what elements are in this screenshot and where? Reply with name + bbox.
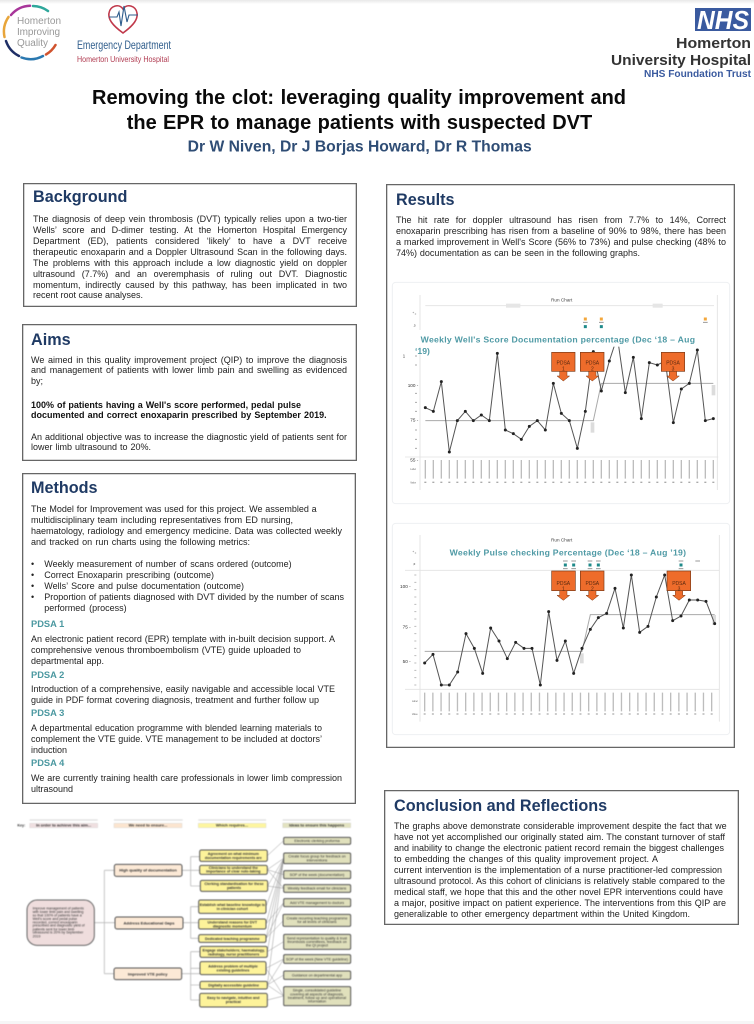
secondary drivers: Address problem of multiple — [208, 964, 258, 968]
chart: weekly Well's score run chart: ⌕ — [413, 323, 416, 328]
secondary drivers: in clinician cohort — [217, 907, 249, 911]
aim box: ultrasound is 20% by September — [33, 931, 84, 935]
aim box: 2019 — [33, 934, 41, 938]
secondary drivers: documentation requirements are — [205, 856, 262, 860]
list: metrics: • — [31, 559, 34, 569]
panel: methods — [22, 473, 356, 804]
aim box: patients sent for lower limb — [33, 927, 74, 931]
panel: results — [386, 184, 735, 748]
secondary drivers — [199, 850, 268, 1007]
text: additional objective: lower limb ultrasound to 20%. — [31, 442, 151, 452]
primary drivers: Address Educational Gaps — [124, 920, 175, 925]
change ideas: Add VTE management to doctors — [290, 901, 344, 905]
secondary drivers: Clerking standardisation for these — [204, 882, 264, 886]
aim box: Improve management of patients — [33, 907, 84, 911]
secondary drivers: Understand reasons for DVT — [208, 920, 258, 924]
text: results body: 74%) documentation as can be seen in the following graphs. — [396, 248, 640, 258]
change ideas: interventions — [307, 858, 328, 862]
aim box: so that 100% of patients have a — [33, 913, 82, 917]
chart: weekly Well's score run chart: Label — [410, 469, 416, 471]
text: PDSA 3: induction — [31, 745, 67, 755]
text: conclusion body: a major, positive impact on patient experience. The interventions from this QIP are — [394, 898, 726, 908]
text: conclusion body: generalizable to other emergency department within the United Kingdom. — [394, 909, 690, 919]
text: conclusion body: current intervention is the implementation of a nurse practitioner-led compression — [394, 865, 722, 875]
chart: weekly pulse checking run chart: Run Chart — [551, 538, 573, 543]
secondary drivers: practical — [226, 1000, 241, 1004]
callout: PDSA 1 marker: 1 — [562, 586, 565, 592]
text: aims target: 100% of patients having a Well's score performed, pedal pulse — [31, 400, 301, 410]
text: results body — [396, 215, 726, 258]
secondary drivers: Agreement on what minimum — [208, 852, 260, 856]
text: conclusion body: ultrasound protocol. As this cohort of clinicians is relatively stable compared to the — [394, 876, 725, 886]
key row: Key: — [17, 824, 25, 828]
aim box: with lower limb pain and swelling — [33, 910, 83, 914]
list: metrics: Weekly measurement of number of scans ordered (outcome) — [44, 559, 292, 569]
text: PDSA 2: Introduction of a comprehensive, easily navigable and accessible local VTE — [31, 684, 335, 694]
text: conclusion body: have not yet accomplished our originally stated aim. The constant turnover of staff — [394, 832, 725, 842]
chart: weekly Well's score run chart — [392, 282, 730, 504]
chart: weekly Well's score run chart: ⁺₊ — [412, 310, 416, 315]
change ideas: thrombosis committees, feedback on — [287, 940, 347, 944]
text: aims target — [31, 400, 327, 420]
change ideas: Weekly feedback email for clinicians — [288, 887, 346, 891]
text: Homerton University Hospital: Homerton University Hospital — [77, 55, 169, 64]
text: PDSA 2 — [31, 684, 335, 705]
aim box: recorded, correct enoxaparin — [33, 920, 77, 924]
panel: background — [23, 183, 357, 307]
list: metrics: • — [31, 581, 34, 591]
chart: weekly Well's score run chart: 55 - — [410, 457, 419, 462]
text: methods intro: haematology, radiology and emergency medicine. Data was collected weekly — [31, 526, 342, 536]
change ideas: covering all aspects of diagnosis, — [290, 992, 344, 996]
secondary drivers: Easy to navigate, intuitive and — [207, 996, 260, 1000]
text: PDSA 3 — [31, 723, 322, 755]
secondary drivers: Dedicated teaching programme — [205, 937, 260, 941]
secondary drivers: patients — [227, 886, 241, 890]
chart: weekly Well's score run chart: 100 - — [408, 383, 419, 388]
list: metrics: Wells’ Score and pulse documentation (outcome) — [44, 581, 244, 591]
text: PDSA 2: guide in PDF format covering diagnosis, treatment and further follow up — [31, 695, 319, 705]
icon: Homerton Improving Quality ring: Quality — [17, 38, 48, 49]
chart: weekly pulse checking run chart — [392, 523, 730, 735]
icon: NHS lozenge: NHS — [697, 5, 750, 35]
key row: We need to ensure... — [129, 823, 167, 828]
list: metrics — [31, 559, 344, 613]
change ideas: Electronic clerking proforma — [294, 839, 341, 843]
text: conclusion body — [394, 821, 727, 919]
connectors: primary drivers — [94, 857, 200, 1000]
list: metrics: • — [31, 592, 34, 602]
text: Emergency Department: Emergency Department — [77, 40, 172, 52]
change ideas: Send representation to quality & trust — [287, 936, 347, 940]
heading: PDSA 3: PDSA 3 — [31, 708, 64, 718]
key row — [17, 820, 351, 828]
chart: weekly pulse checking run chart: 75 - — [403, 624, 411, 629]
change ideas: SOP of the week (documentation) — [290, 873, 344, 877]
callout: PDSA 3 marker: 3 — [678, 586, 681, 592]
text: PDSA 1: departmental app. — [31, 656, 104, 666]
text: background body: Department (ED), patients considered ‘likely’ to have a DVT receive — [33, 236, 347, 246]
chart: weekly Well's score run chart: 75 - — [410, 418, 419, 423]
chart: weekly pulse checking run chart: Label — [412, 701, 418, 703]
change ideas: Guidance on departmental app — [292, 973, 342, 977]
text: PDSA 1: An electronic patient record (EPR) template with in-built decision support. A — [31, 634, 335, 644]
list: metrics: Proportion of patients diagnosed with DVT divided by the number of scans — [44, 592, 344, 602]
text: background body: Wells’ score and D-dimer testing. At the Homerton Hospital Emergency — [33, 225, 347, 235]
text: aims intro — [31, 355, 347, 386]
callout: PDSA 3 marker: PDSA — [666, 361, 680, 367]
title: the EPR to manage patients with suspected DVT — [127, 112, 592, 134]
change ideas: Single, consolidated guideline — [293, 989, 341, 993]
text: PDSA 4: ultrasound — [31, 784, 73, 794]
icon: heart with ECG trace — [109, 6, 138, 33]
text: aims intro: by; — [31, 376, 43, 386]
change ideas — [283, 837, 351, 1006]
list: metrics: Correct Enoxaparin prescribing (outcome) — [44, 570, 214, 580]
logo: NHS Homerton University Hospital — [611, 5, 752, 80]
text: PDSA 1 — [31, 634, 335, 666]
text: results body: a marked improvement in Well's Score (56% to 73%) and pulse checking (48% to — [396, 237, 726, 247]
text: NHS Foundation Trust: NHS Foundation Trust — [644, 69, 752, 80]
text: Homerton: Homerton — [676, 35, 751, 52]
chart: weekly pulse checking run chart: 50 - — [403, 659, 411, 664]
callout: PDSA 3 marker: PDSA — [672, 581, 686, 587]
text: background body: ultrasound (7.7%) and an overemphasis of ruling out DVT. Diagnostic — [33, 269, 347, 279]
text: background body: recent root cause analyses. — [33, 290, 143, 300]
chart: weekly pulse checking run chart: ⁺₊ — [412, 549, 416, 554]
heading: background: Background — [33, 188, 127, 206]
aim box: Well's score and pedal pulse — [33, 917, 77, 921]
text: conclusion body: medical staff, we hope that this and the other novel EPR interventions could have — [394, 887, 723, 897]
text: conclusion body: The graphs above demonstrate considerable improvement despite the fact that we — [394, 821, 727, 831]
panel: conclusion and reflections — [384, 790, 739, 925]
text: methods intro: The Model for Improvement was used for this project. We assembled a — [31, 504, 317, 514]
logo: Homerton Improving Quality and Emergency Department — [2, 4, 172, 64]
text: background body: The problems with this approach include a low diagnostic yield on doppler — [33, 258, 347, 268]
secondary drivers: importance of clear note-taking — [206, 870, 261, 874]
chart: weekly pulse checking run chart: Weekly Pulse checking Percentage (Dec ‘18 – Aug ’19) — [450, 547, 686, 557]
callout: PDSA 2 marker: 2 — [591, 586, 594, 592]
key row: Ideas to ensure this happens — [289, 823, 345, 828]
chart: weekly Well's score run chart: Value — [410, 482, 417, 484]
change ideas: Create focus group for feedback on — [288, 855, 346, 859]
heading: methods: Methods — [31, 479, 98, 497]
text: results body: enoxaparin prescribing has risen from a baseline of 90% to 98%, there has been — [396, 226, 726, 236]
heading: results: Results — [396, 191, 454, 209]
text: background body — [33, 214, 347, 300]
driver diagram — [16, 819, 352, 1008]
callout: PDSA 1 marker: PDSA — [557, 581, 571, 587]
heading: PDSA 1: PDSA 1 — [31, 619, 64, 629]
change ideas: information — [308, 1000, 326, 1004]
primary drivers — [114, 864, 183, 980]
icon: Homerton Improving Quality ring: Improving — [17, 27, 60, 38]
callout: PDSA 2 marker — [580, 571, 604, 600]
aim box — [27, 900, 94, 945]
callout: PDSA 2 marker: PDSA — [586, 581, 600, 587]
secondary drivers: Digitally accessible guideline — [208, 984, 259, 988]
list: metrics: • — [31, 570, 34, 580]
text: PDSA 4: We are currently training health care professionals in lower limb compression — [31, 773, 342, 783]
text: background body: The diagnosis of deep vein thrombosis (DVT) typically relies upon a two-tier — [33, 214, 347, 224]
text: methods intro: and tracked on run charts using the following metrics: — [31, 537, 250, 547]
chart: weekly pulse checking run chart: ⌕ — [413, 561, 416, 566]
text: methods intro — [31, 504, 342, 547]
heading: conclusion: Conclusion and Reflections — [394, 797, 607, 815]
primary drivers: Improved VTE policy — [128, 971, 168, 976]
change ideas: Create recurring teaching programme — [287, 916, 347, 920]
secondary drivers: Clinicians to understand the — [209, 866, 258, 870]
text: University Hospital: University Hospital — [611, 52, 751, 69]
text: background body: therapeutic enoxaparin and a Doppler Ultrasound Scan in the following days. — [33, 247, 347, 257]
authors: Dr W Niven, Dr J Borjas Howard, Dr R Thomas — [188, 138, 532, 156]
chart: weekly Well's score run chart: Weekly Well's Score Documentation percentage (Dec ‘18 – Aug — [421, 334, 695, 344]
title — [92, 87, 626, 134]
text: methods intro: multidisciplinary team including representatives from ED nursing, — [31, 515, 293, 525]
chart: weekly pulse checking run chart: 100 - — [400, 584, 411, 589]
key row: In order to achieve this aim... — [36, 823, 91, 828]
connectors: drivers to ideas — [266, 841, 284, 1000]
text: results body: The hit rate for doppler ultrasound has risen from 7.7% to 14%, Correct — [396, 215, 726, 225]
heading: PDSA 2: PDSA 2 — [31, 670, 64, 680]
title: Removing the clot: leveraging quality improvement and — [92, 87, 626, 109]
callout: PDSA 1 marker: PDSA — [557, 361, 571, 367]
text: PDSA 3: A departmental education programme with blended learning materials to — [31, 723, 322, 733]
callout: PDSA 2 marker: 2 — [591, 367, 594, 373]
text: background body: momentum, indirectly caused by this pathway, has been implicated in two — [33, 280, 347, 290]
change ideas: the QI project — [306, 944, 328, 948]
secondary drivers: Engage stakeholders; haematology, — [203, 948, 265, 952]
text: additional objective — [31, 432, 347, 452]
heading: aims: Aims — [31, 331, 71, 349]
heading: PDSA 4: PDSA 4 — [31, 758, 64, 768]
change ideas: SOP of the week (New VTE guideline) — [286, 957, 348, 961]
list: metrics: performed (process) — [44, 603, 127, 613]
secondary drivers: diagnostic momentum — [213, 924, 253, 928]
callout: PDSA 3 marker: 3 — [672, 367, 675, 373]
icon: Homerton Improving Quality ring: Homerton — [17, 16, 61, 27]
text: PDSA 1: comprehensive venous thromboembolism (VTE) guide uploaded to — [31, 645, 301, 655]
callout: PDSA 2 marker — [580, 352, 604, 381]
secondary drivers: Establish what baseline knowledge is — [200, 903, 265, 907]
text: conclusion body: and inability to change the electronic patient record remain the biggest challenges — [394, 843, 724, 853]
secondary drivers: radiology, nurse practitioners — [208, 952, 259, 956]
chart: weekly Well's score run chart: ‘19) — [415, 346, 430, 356]
text: PDSA 4 — [31, 773, 342, 794]
callout: PDSA 3 marker — [661, 352, 685, 381]
chart: weekly Well's score run chart: 1 — [403, 354, 406, 359]
chart: weekly Well's score run chart: Run Chart — [551, 298, 573, 303]
aim box: prescribed and diagnostic yield of — [33, 924, 85, 928]
text: aims intro: and management of patients with lower limb pain and swelling as evidenced — [31, 365, 347, 375]
text: additional objective: An additional objective was to increase the diagnostic yield of patients sent for — [31, 432, 347, 442]
callout: PDSA 3 marker — [667, 571, 691, 600]
callout: PDSA 1 marker: 1 — [562, 367, 565, 373]
primary drivers: High quality of documentation — [119, 868, 177, 873]
change ideas: treatment, follow up and operational — [288, 996, 346, 1000]
callout: PDSA 1 marker — [552, 571, 575, 600]
key row: Which requires... — [216, 823, 248, 828]
panel: aims — [22, 324, 357, 461]
callout: PDSA 1 marker — [552, 352, 575, 381]
change ideas: for all levels of clinicians — [297, 920, 337, 924]
chart: weekly pulse checking run chart: Value — [412, 714, 418, 716]
text: aims intro: We aimed in this quality improvement project (QIP) to improve the diagnosis — [31, 355, 347, 365]
secondary drivers: existing guidelines — [217, 968, 249, 972]
text: PDSA 3: complement the VTE guide. VTE management to be included at doctors’ — [31, 734, 322, 744]
text: conclusion body: to embedding the changes of this quality improvement project. A — [394, 854, 658, 864]
callout: PDSA 2 marker: PDSA — [586, 361, 600, 367]
icon: Homerton Improving Quality ring — [4, 6, 61, 59]
text: aims target: documented and correct enoxaparin prescribed by September 2019. — [31, 410, 327, 420]
